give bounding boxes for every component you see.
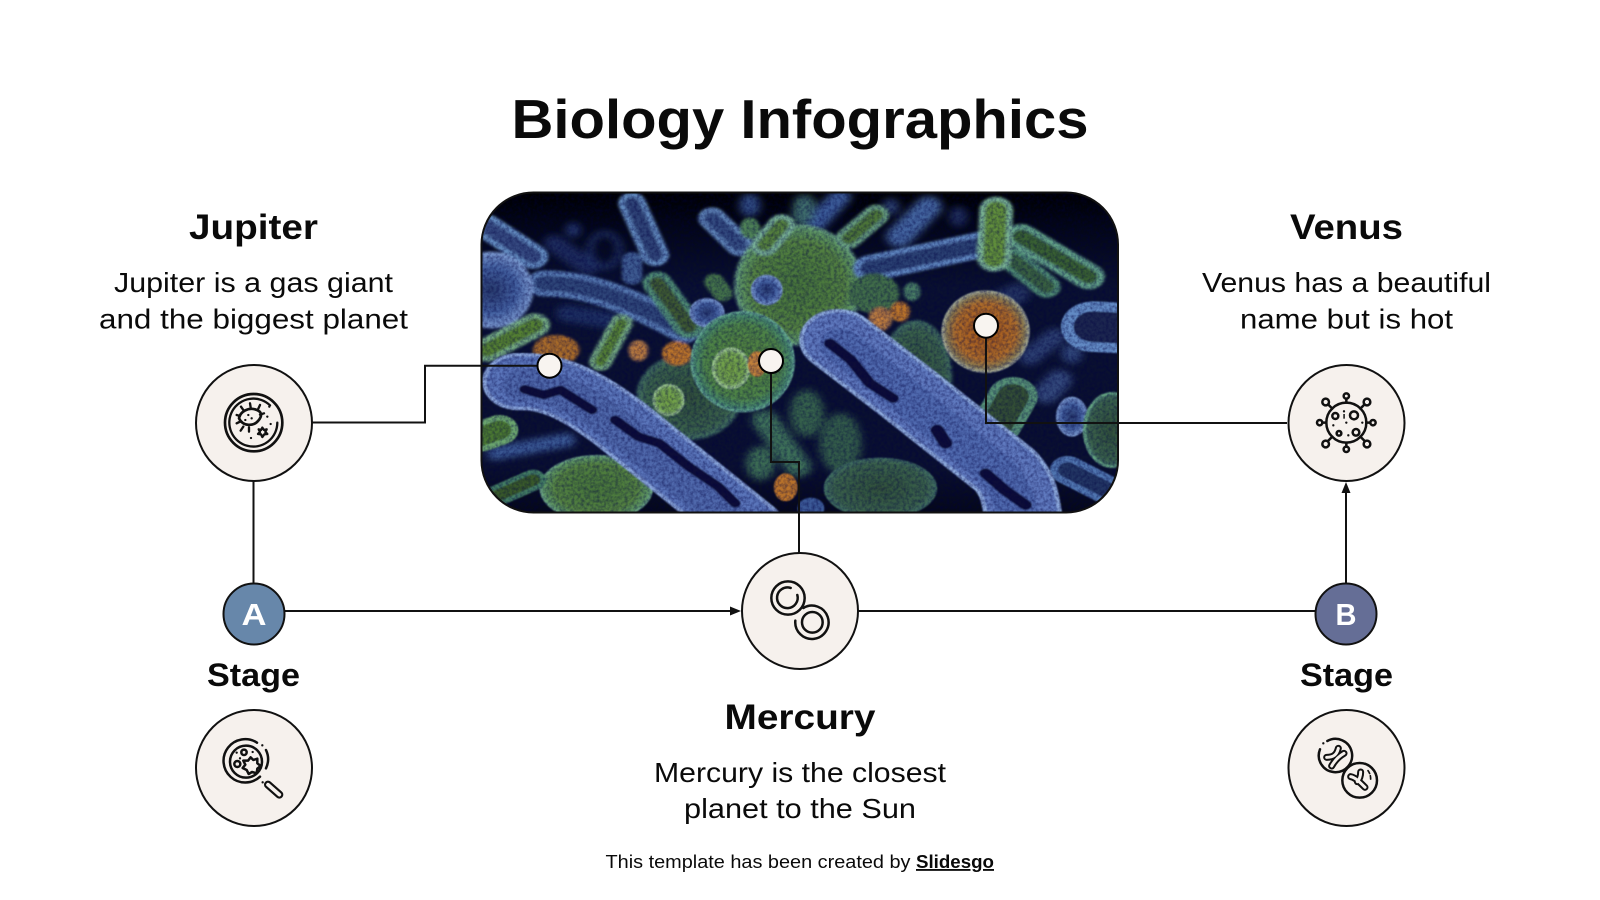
marker: Venus point — [974, 314, 998, 338]
icon: Venus virus — [1288, 365, 1404, 481]
Mercury text: planet to the Sun — [684, 793, 916, 824]
image grain texture — [481, 192, 1119, 514]
Venus text: name but is hot — [1240, 304, 1453, 334]
marker: Mercury point — [759, 349, 783, 373]
badge A: A — [242, 597, 266, 632]
mid capsules — [449, 203, 1089, 440]
Stage A label: Stage — [207, 657, 300, 693]
Venus text: Venus has a beautiful — [1202, 267, 1491, 298]
icon: magnifier over microbes — [196, 710, 312, 826]
title: Biology Infographics — [512, 88, 1088, 150]
Mercury heading: Mercury — [724, 698, 876, 737]
image border — [482, 192, 1118, 512]
connector: image point to Venus — [986, 338, 1287, 423]
Mercury text — [654, 757, 946, 824]
connector: image point to Mercury — [771, 373, 799, 553]
Stage B label: Stage — [1300, 657, 1393, 693]
badge B — [1316, 584, 1376, 644]
badge B: B — [1336, 597, 1356, 632]
icon: Mercury cells — [742, 553, 858, 669]
connector: Jupiter to image point — [312, 366, 537, 422]
big capsule left — [518, 382, 748, 527]
big capsule right — [830, 340, 1026, 533]
arrow: stage A to Mercury — [285, 606, 741, 616]
Jupiter heading: Jupiter — [189, 208, 318, 247]
Jupiter text: and the biggest planet — [99, 304, 408, 334]
back blurred cells — [495, 193, 1082, 480]
connector: Jupiter to stage A — [252, 481, 254, 583]
footer credit: This template has been created by — [606, 851, 911, 872]
footer credit: Slidesgo — [916, 851, 994, 872]
arrow: stage B to Venus — [1342, 482, 1350, 583]
Venus heading: Venus — [1290, 208, 1403, 247]
icon: Jupiter petri dish — [196, 365, 312, 481]
foreground cells — [481, 275, 1139, 522]
Jupiter text — [99, 267, 408, 334]
icon: chromosomes in cells — [1288, 710, 1404, 826]
badge A — [224, 584, 284, 644]
Venus text — [1202, 267, 1491, 334]
Mercury text: Mercury is the closest — [654, 757, 946, 788]
panel: microscope image of bacteria — [482, 194, 1117, 512]
connector: Mercury to stage B — [858, 610, 1316, 612]
Jupiter text: Jupiter is a gas giant — [114, 267, 393, 298]
marker: Jupiter point — [538, 354, 562, 378]
